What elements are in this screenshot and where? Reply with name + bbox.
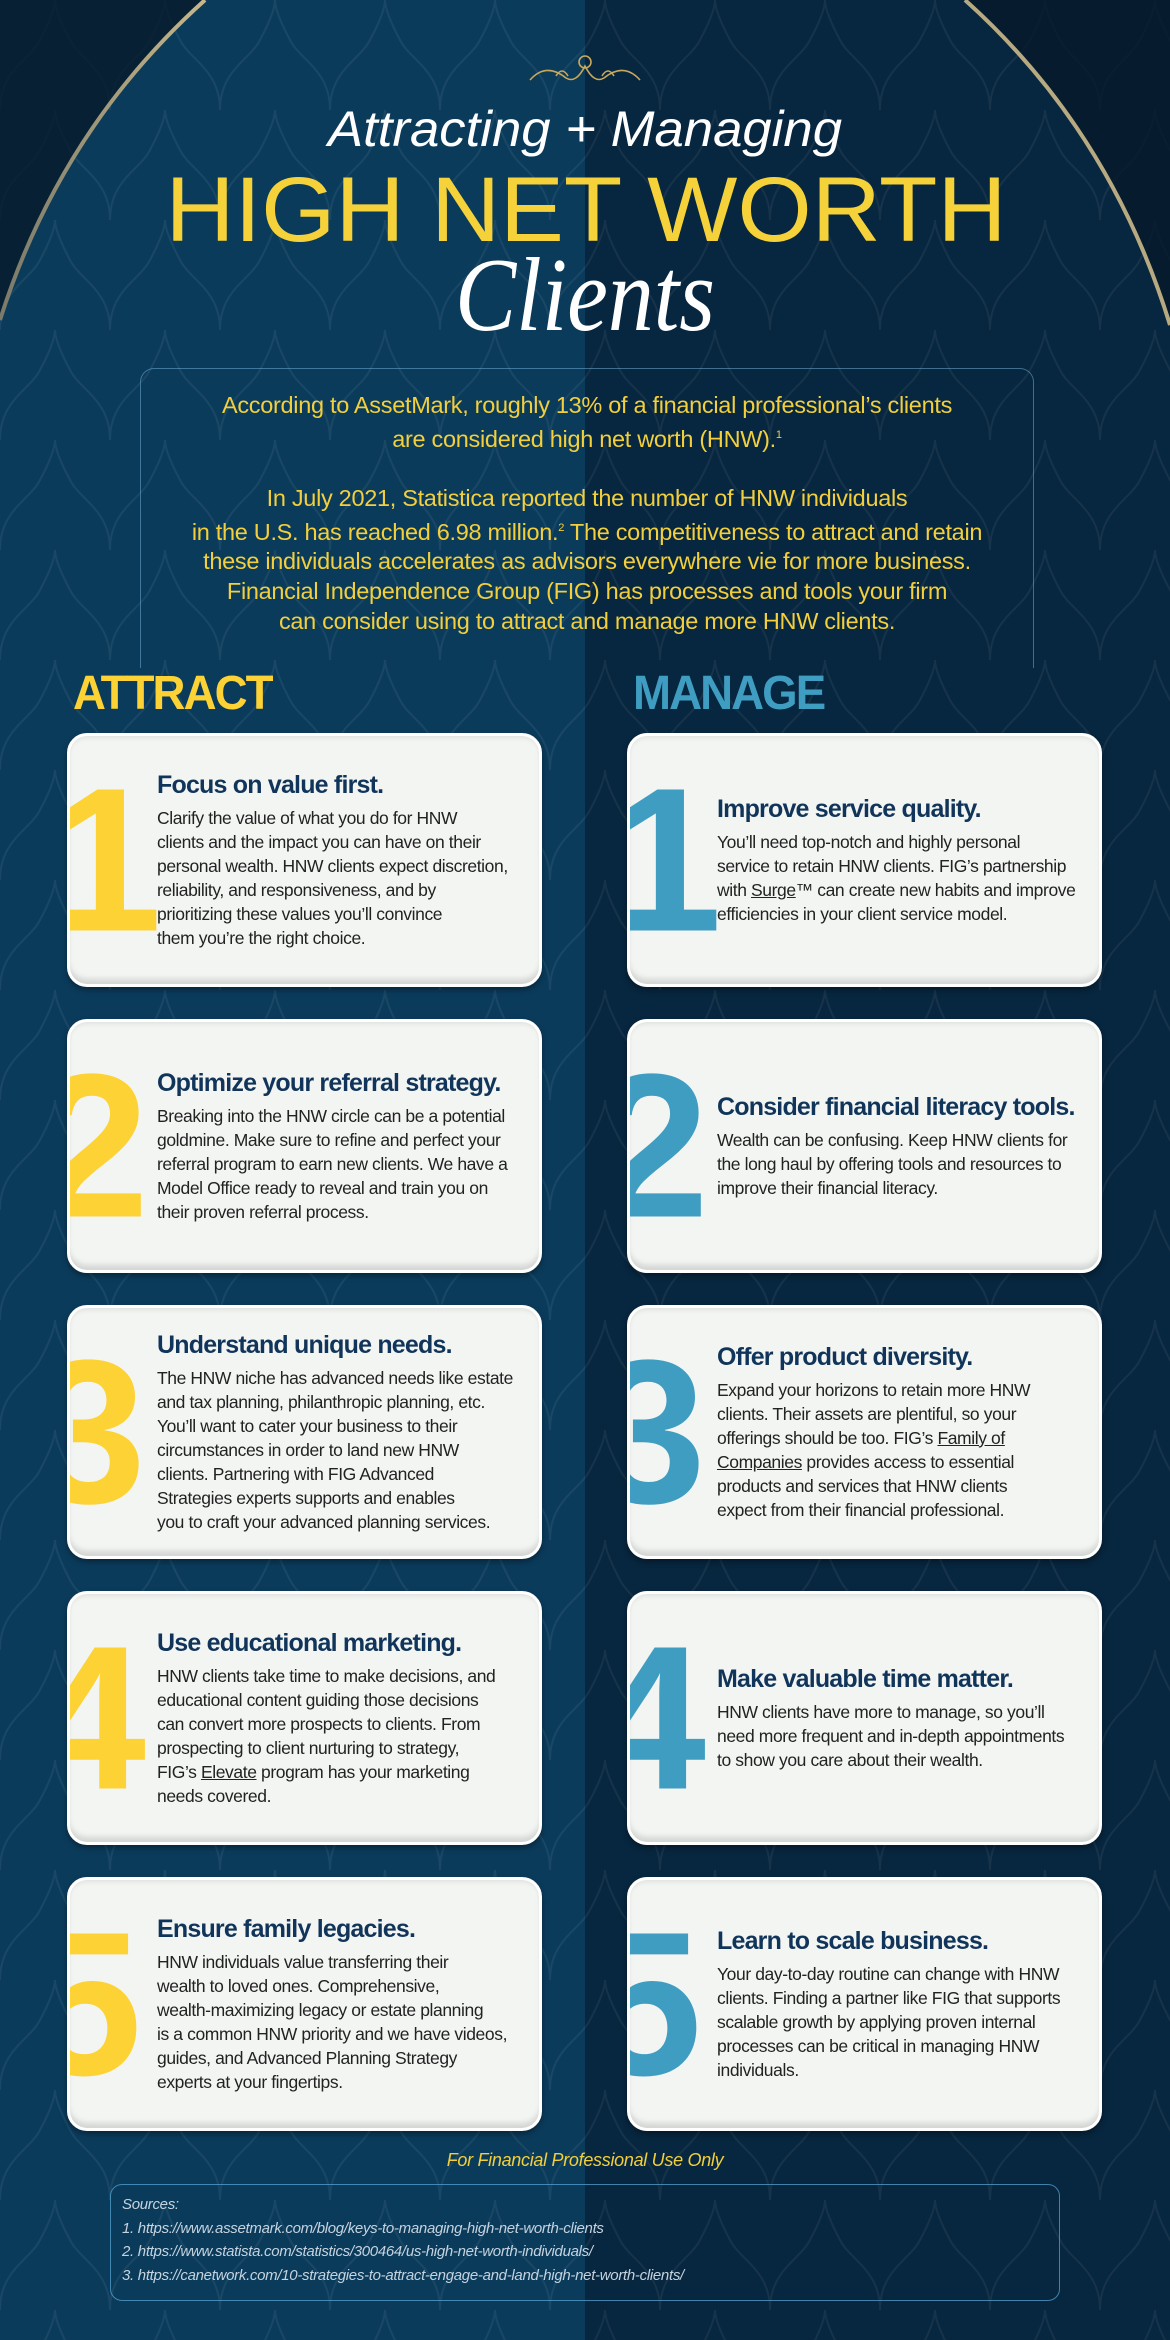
card: attract 3: The HNW niche has advanced needs like estate xyxy=(157,1368,513,1388)
intro text box: are considered high net worth (HNW).1 xyxy=(392,426,782,452)
card: manage 1 xyxy=(627,733,1102,987)
sources box xyxy=(110,2184,1060,2301)
card: manage 4: need more frequent and in-depth appointments xyxy=(717,1726,1064,1746)
card: attract 5: Ensure family legacies. xyxy=(157,1914,415,1942)
card: attract 2: their proven referral process. xyxy=(157,1202,369,1222)
title: HIGH NET WORTH xyxy=(166,159,1006,261)
card: manage 1: with Surge™ can create new habits and improve xyxy=(717,880,1075,900)
card: manage 3: Companies provides access to essential xyxy=(717,1452,1014,1472)
card: attract 4: FIG’s Elevate program has your marketing xyxy=(157,1762,469,1782)
intro text box: in the U.S. has reached 6.98 million.2 The competitiveness to attract and retain xyxy=(192,518,982,544)
disclaimer: For Financial Professional Use Only xyxy=(447,2150,723,2170)
card: attract 3: You’ll want to cater your business to their xyxy=(157,1416,457,1436)
card: attract 1: them you’re the right choice. xyxy=(157,928,365,948)
intro text box: can consider using to attract and manage more HNW clients. xyxy=(279,608,895,634)
card: manage 3: Expand your horizons to retain more HNW xyxy=(717,1380,1030,1400)
card: manage 3: Offer product diversity. xyxy=(717,1342,972,1370)
card: manage 5: Learn to scale business. xyxy=(717,1926,988,1954)
card: attract 5: experts at your fingertips. xyxy=(157,2072,343,2092)
card: attract 4: HNW clients take time to make decisions, and xyxy=(157,1666,495,1686)
card: manage 1: efficiencies in your client service model. xyxy=(717,904,1007,924)
title: Clients xyxy=(455,236,715,353)
card: attract 2: goldmine. Make sure to refine and perfect your xyxy=(157,1130,500,1150)
card: attract 1: Clarify the value of what you do for HNW xyxy=(157,808,457,828)
card: manage 2: the long haul by offering tools and resources to xyxy=(717,1154,1061,1174)
card: manage 4: Make valuable time matter. xyxy=(717,1664,1013,1692)
heading: attract: ATTRACT xyxy=(73,667,272,720)
card: manage 2: Wealth can be confusing. Keep HNW clients for xyxy=(717,1130,1067,1150)
card: attract 5: wealth to loved ones. Comprehensive, xyxy=(157,1976,439,1996)
card: manage 5: individuals. xyxy=(717,2060,799,2080)
card: manage 5: Your day-to-day routine can change with HNW xyxy=(717,1964,1059,1984)
card: manage 3: products and services that HNW clients xyxy=(717,1476,1007,1496)
card: manage 1: service to retain HNW clients. FIG’s partnership xyxy=(717,856,1066,876)
card: attract 4: Use educational marketing. xyxy=(157,1628,461,1656)
card: attract 3: clients. Partnering with FIG Advanced xyxy=(157,1464,434,1484)
card: manage 4 xyxy=(627,1591,1102,1845)
card: attract 5: guides, and Advanced Planning Strategy xyxy=(157,2048,457,2068)
card: attract 4: educational content guiding those decisions xyxy=(157,1690,478,1710)
card: attract 2: Model Office ready to reveal and train you on xyxy=(157,1178,488,1198)
card: manage 5: scalable growth by applying proven internal xyxy=(717,2012,1035,2032)
card: attract 2: Optimize your referral strategy. xyxy=(157,1068,501,1096)
card: attract 1: personal wealth. HNW clients expect discretion, xyxy=(157,856,508,876)
card: attract 2: Breaking into the HNW circle can be a potential xyxy=(157,1106,505,1126)
card: attract 3: and tax planning, philanthropic planning, etc. xyxy=(157,1392,485,1412)
intro text box: Financial Independence Group (FIG) has processes and tools your firm xyxy=(227,578,947,604)
sources box: Sources: xyxy=(122,2196,179,2213)
card: attract 5: is a common HNW priority and we have videos, xyxy=(157,2024,507,2044)
card: attract 1: clients and the impact you can have on their xyxy=(157,832,481,852)
card: attract 1: reliability, and responsiveness, and by xyxy=(157,880,436,900)
card: manage 1: Improve service quality. xyxy=(717,794,981,822)
card: attract 3 xyxy=(67,1305,542,1559)
card: attract 3: Understand unique needs. xyxy=(157,1330,452,1358)
card: manage 2: improve their financial literacy. xyxy=(717,1178,938,1198)
card: attract 4: needs covered. xyxy=(157,1786,271,1806)
card: attract 3: you to craft your advanced planning services. xyxy=(157,1512,490,1532)
card: attract 1 xyxy=(67,733,542,987)
intro text box: In July 2021, Statistica reported the number of HNW individuals xyxy=(267,485,907,511)
card: manage 3 xyxy=(627,1305,1102,1559)
card: manage 3: clients. Their assets are plentiful, so your xyxy=(717,1404,1016,1424)
card: attract 4: can convert more prospects to clients. From xyxy=(157,1714,480,1734)
card: attract 2 xyxy=(67,1019,542,1273)
card: attract 4: prospecting to client nurturing to strategy, xyxy=(157,1738,459,1758)
card: manage 2 xyxy=(627,1019,1102,1273)
card: attract 1: Focus on value first. xyxy=(157,770,383,798)
card: manage 5: processes can be critical in managing HNW xyxy=(717,2036,1039,2056)
card: manage 4: to show you care about their wealth. xyxy=(717,1750,983,1770)
ornament xyxy=(530,55,640,80)
card: attract 3: Strategies experts supports and enables xyxy=(157,1488,455,1508)
card: attract 1: prioritizing these values you’ll convince xyxy=(157,904,442,924)
card: manage 5 xyxy=(627,1877,1102,2131)
card: attract 5: wealth-maximizing legacy or estate planning xyxy=(157,2000,483,2020)
intro text box xyxy=(140,368,1034,668)
card: attract 2: referral program to earn new clients. We have a xyxy=(157,1154,508,1174)
card: attract 5 xyxy=(67,1877,542,2131)
card: manage 4: HNW clients have more to manage, so you’ll xyxy=(717,1702,1045,1722)
intro text box: these individuals accelerates as advisors everywhere vie for more business. xyxy=(203,548,971,574)
heading: manage: MANAGE xyxy=(633,667,824,720)
card: attract 5: HNW individuals value transferring their xyxy=(157,1952,448,1972)
card: attract 4 xyxy=(67,1591,542,1845)
card: manage 2: Consider financial literacy tools. xyxy=(717,1092,1075,1120)
card: manage 1: You’ll need top-notch and highly personal xyxy=(717,832,1020,852)
sources box: 3. https://canetwork.com/10-strategies-to-attract-engage-and-land-high-net-worth-clients/ xyxy=(122,2266,684,2284)
card: manage 3: offerings should be too. FIG’s Family of xyxy=(717,1428,1005,1448)
title xyxy=(166,101,1006,353)
intro text box: According to AssetMark, roughly 13% of a financial professional’s clients xyxy=(222,392,952,418)
title: Attracting + Managing xyxy=(325,101,842,157)
sources box: 1. https://www.assetmark.com/blog/keys-to-managing-high-net-worth-clients xyxy=(122,2220,604,2236)
card: manage 5: clients. Finding a partner like FIG that supports xyxy=(717,1988,1060,2008)
card: manage 3: expect from their financial professional. xyxy=(717,1500,1004,1520)
sources box: 2. https://www.statista.com/statistics/300464/us-high-net-worth-individuals/ xyxy=(122,2243,593,2260)
card: attract 3: circumstances in order to land new HNW xyxy=(157,1440,459,1460)
